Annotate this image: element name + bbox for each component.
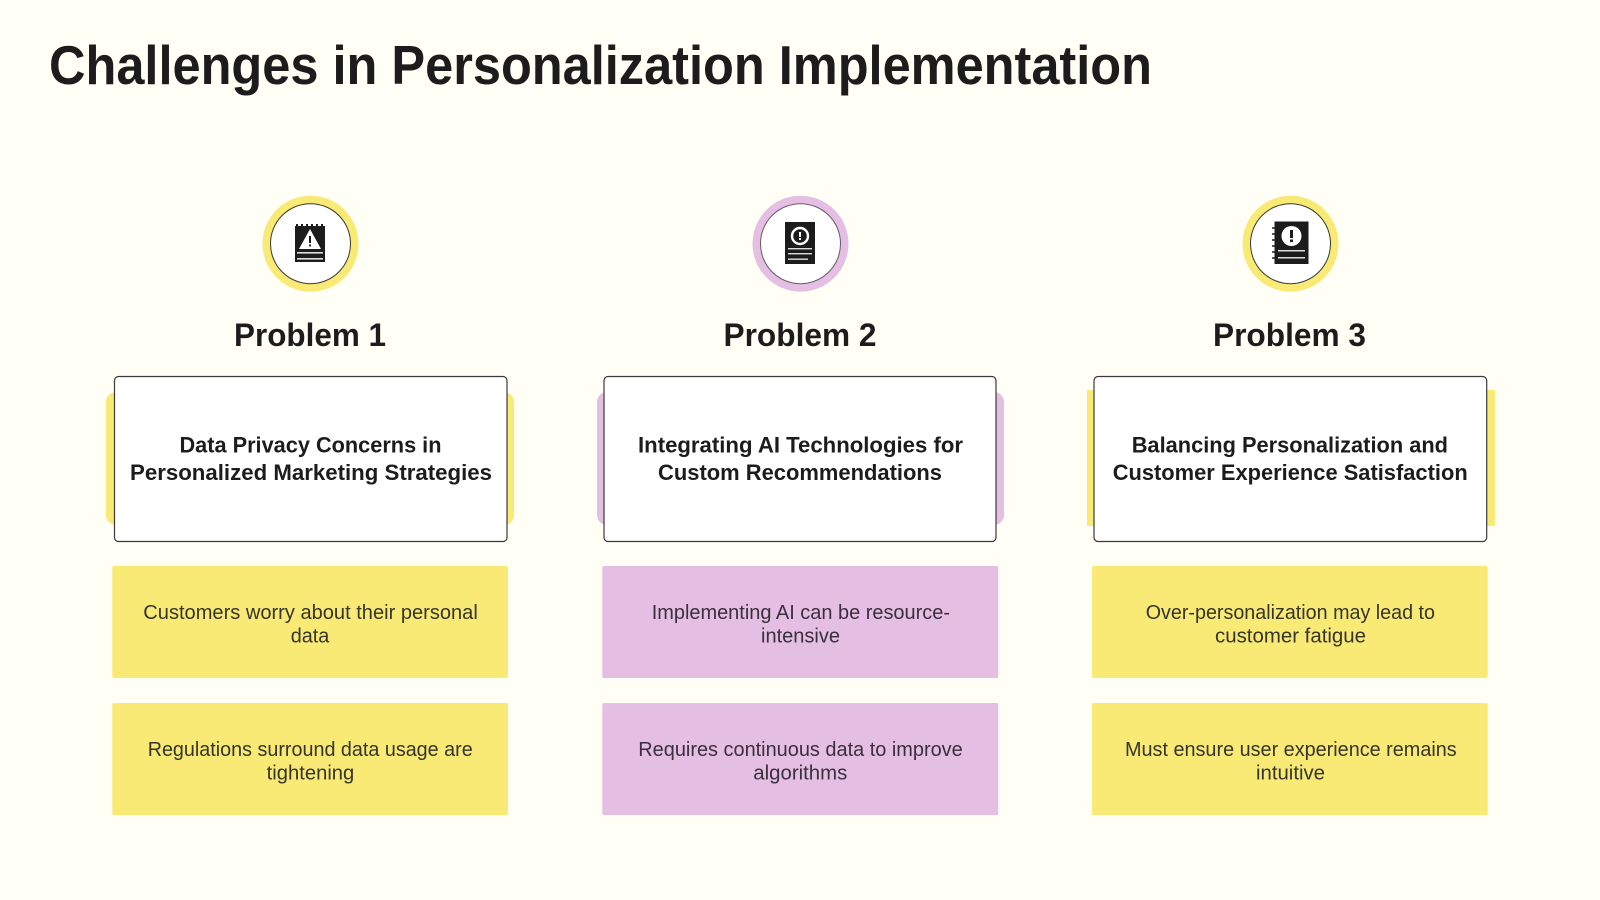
- detail: customers worry: data: [291, 626, 330, 648]
- title: Challenges in Personalization Implementation: [49, 34, 1152, 96]
- heading: Problem 1: Problem 1: [234, 317, 386, 353]
- detail: resource-intensive: [602, 566, 998, 678]
- icon: settings alert document: [752, 196, 848, 292]
- detail: continuous data: [602, 703, 998, 815]
- detail: regulations: tightening: [267, 762, 354, 784]
- detail: intuitive experience: [1092, 703, 1488, 815]
- heading: Problem 2: Problem 2: [724, 317, 876, 353]
- detail: regulations: Regulations surround data usage are: [148, 739, 473, 761]
- icon: alert spiral notebook: [1242, 196, 1338, 292]
- card: problem title: Data Privacy Concerns in: [180, 432, 442, 458]
- detail: customers worry: Customers worry about their personal: [143, 602, 478, 624]
- card: problem title: Balancing Personalization and: [1132, 432, 1448, 458]
- card: problem title: Customer Experience Satisfaction: [1113, 460, 1468, 485]
- detail: customer fatigue: customer fatigue: [1215, 626, 1366, 648]
- heading: Problem 3: Problem 3: [1213, 317, 1366, 353]
- panel: problem 2: [597, 196, 1004, 815]
- panel: problem 1: [106, 196, 514, 815]
- card: problem title: Personalized Marketing Strategies: [130, 460, 492, 485]
- card: problem title: [597, 376, 1004, 542]
- detail: customers worry: [112, 566, 508, 678]
- detail: customer fatigue: Over-personalization may lead to: [1146, 602, 1435, 624]
- card: problem title: [1087, 376, 1495, 542]
- detail: resource-intensive: intensive: [761, 626, 840, 648]
- detail: customer fatigue: [1092, 566, 1488, 678]
- panel: problem 3: [1087, 196, 1495, 815]
- icon: warning notepad: [262, 196, 358, 292]
- detail: regulations: [112, 703, 508, 815]
- detail: continuous data: algorithms: [753, 762, 847, 784]
- card: problem title: Custom Recommendations: [658, 460, 942, 485]
- detail: continuous data: Requires continuous data to improve: [638, 739, 963, 761]
- detail: intuitive experience: intuitive: [1256, 762, 1325, 784]
- card: problem title: [106, 376, 514, 542]
- detail: intuitive experience: Must ensure user experience remains: [1125, 739, 1457, 761]
- detail: resource-intensive: Implementing AI can be resource-: [652, 602, 950, 624]
- card: problem title: Integrating AI Technologies for: [638, 432, 963, 458]
